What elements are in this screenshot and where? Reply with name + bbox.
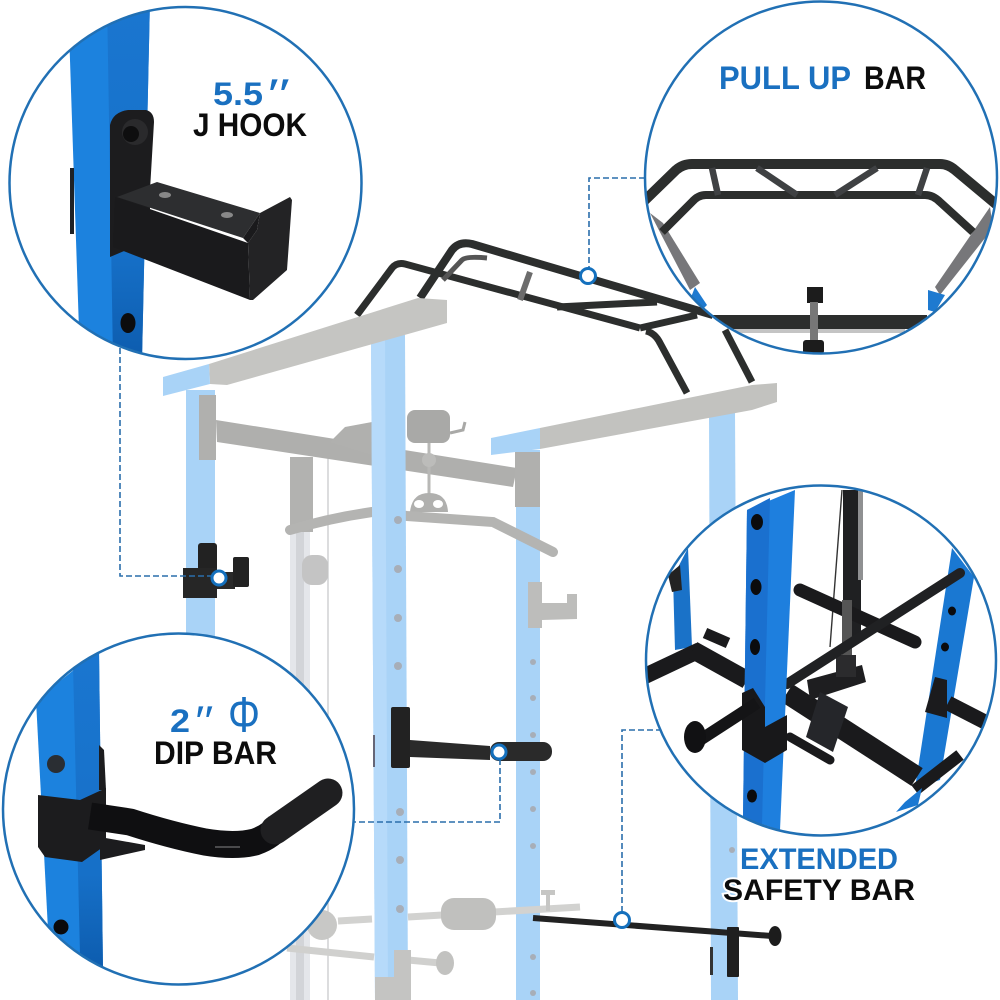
panel: dip bar callout (3, 634, 354, 984)
rack top beams (163, 298, 777, 455)
power rack faded frame (186, 335, 738, 1000)
label: 2 inch dip bar (154, 687, 277, 771)
panel: pull up bar callout (640, 2, 997, 354)
leader: dip bar (354, 745, 506, 822)
label: 5.5 inch J hook (193, 70, 307, 143)
label: 5.5 inch J hook: ′′ (265, 70, 290, 117)
label: 2 inch dip bar: 2 (170, 703, 190, 739)
label: pull up bar: BAR (864, 60, 926, 96)
label: 2 inch dip bar: ′′ (193, 697, 213, 744)
panel: j hook callout (10, 0, 362, 360)
pull up bar (on rack) (357, 243, 752, 393)
label: 5.5 inch J hook: J HOOK (193, 107, 307, 143)
label: extended safety bar: EXTENDED (740, 843, 898, 876)
leader: pull up bar (580, 178, 645, 284)
label: pull up bar (719, 60, 926, 96)
label: pull up bar: PULL UP (719, 60, 851, 96)
safety bar (on rack) (533, 918, 782, 977)
label: extended safety bar (723, 843, 915, 907)
label: 2 inch dip bar: Φ (228, 687, 260, 743)
dip bar (on rack) (373, 707, 552, 768)
label: 2 inch dip bar: DIP BAR (154, 735, 277, 771)
panel: extended safety bar callout (645, 486, 996, 836)
leader: j hook (120, 348, 226, 585)
label: extended safety bar: SAFETY BAR (723, 874, 915, 907)
leader: safety bar (614, 730, 661, 928)
label: 5.5 inch J hook: 5.5 (213, 76, 263, 112)
J hook (on rack) (183, 543, 249, 598)
